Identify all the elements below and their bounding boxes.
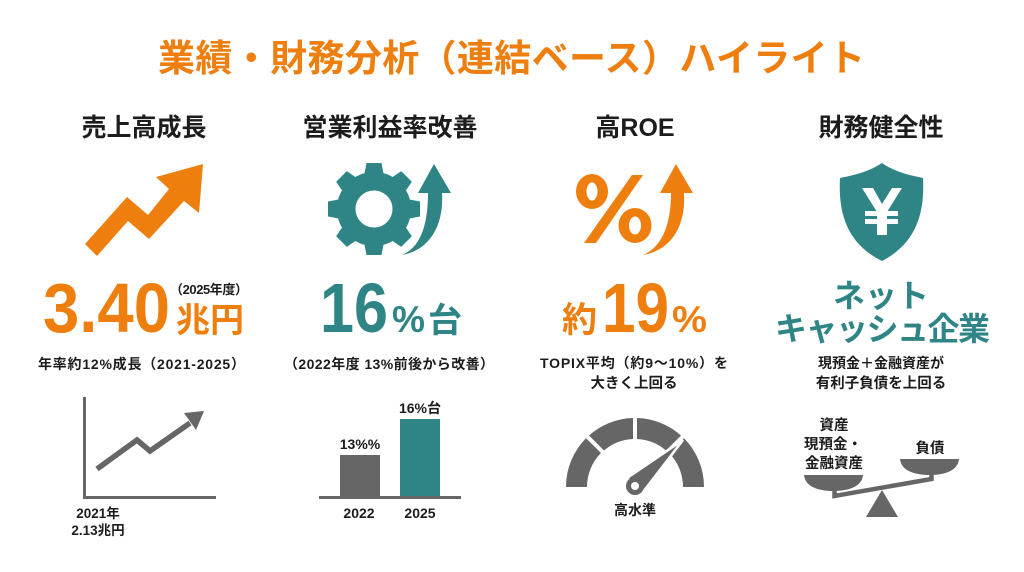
value: net cash company: ネット [833,278,929,314]
balance scale: assets vs liabilities: 負債 [916,439,945,457]
value: 16 percent range: % [392,299,425,340]
text: TOPIX comparison: 大きく上回る [590,375,678,392]
value: net cash company [775,278,990,347]
value: 16 percent range: 台 [428,302,462,340]
bar chart: margin 2022 vs 2025: 2025 [404,505,436,521]
balance scale: assets vs liabilities: 資産 [820,416,848,434]
text: cash exceeds debt: 現預金＋金融資産が [818,355,944,371]
gauge: high level: 高水準 [614,502,656,518]
bar chart: margin 2022 vs 2025 [319,400,461,521]
chart label: 2021 value [71,505,125,538]
icon: gear with up arrow [328,163,451,255]
icon: percent with up arrow [576,164,693,255]
balance scale: assets vs liabilities: 金融資産 [805,454,863,472]
value: about 19 percent [562,269,707,347]
panel: operating margin [284,114,494,521]
text: TOPIX comparison [540,355,728,392]
heading: high ROE: 高ROE [595,114,675,142]
heading: sales growth: 売上高成長 [81,114,207,142]
icon: yen shield [840,163,923,261]
panel: high ROE [540,114,728,518]
balance scale: assets vs liabilities: 現預金・ [804,435,862,453]
text: 2022 comparison: （2022年度 13%前後から改善） [284,356,494,372]
value: 3.40 trillion yen: 兆円 [176,302,244,340]
value: about 19 percent: % [672,299,707,340]
text: annual growth: 年率約12%成長（2021-2025） [38,356,245,372]
value: 16 percent range [320,269,462,347]
bar chart: margin 2022 vs 2025: 13%% [340,436,381,452]
value: 16 percent range: 16 [320,269,388,347]
value: 3.40 trillion yen: 3.40 [43,269,170,347]
value: about 19 percent: 約 [562,301,597,340]
bar chart: margin 2022 vs 2025: 16%台 [399,400,441,416]
panel: financial soundness [775,114,990,517]
text: cash exceeds debt: 有利子負債を上回る [816,374,946,392]
line chart: sales 2021 to 2025 [83,397,216,499]
title: 業績・財務分析（連結ベース）ハイライト [158,38,865,79]
bar chart: margin 2022 vs 2025: 2022 [343,505,375,521]
chart label: 2021 value: 2.13兆円 [71,523,125,538]
balance scale: assets vs liabilities [804,416,959,517]
value: about 19 percent: 19 [602,269,669,347]
heading: operating margin: 営業利益率改善 [302,114,478,142]
text: TOPIX comparison: TOPIX平均（約9〜10%）を [540,355,728,371]
panel: sales growth [38,114,248,538]
heading: financial soundness: 財務健全性 [818,114,944,142]
value: 3.40 trillion yen [43,269,248,347]
icon: orange rising arrow [85,164,203,256]
chart label: 2021 value: 2021年 [76,505,120,521]
value: net cash company: キャッシュ企業 [775,311,990,347]
value: 3.40 trillion yen: （2025年度） [170,282,248,297]
text: cash exceeds debt [816,355,946,392]
gauge: high level [566,418,704,518]
